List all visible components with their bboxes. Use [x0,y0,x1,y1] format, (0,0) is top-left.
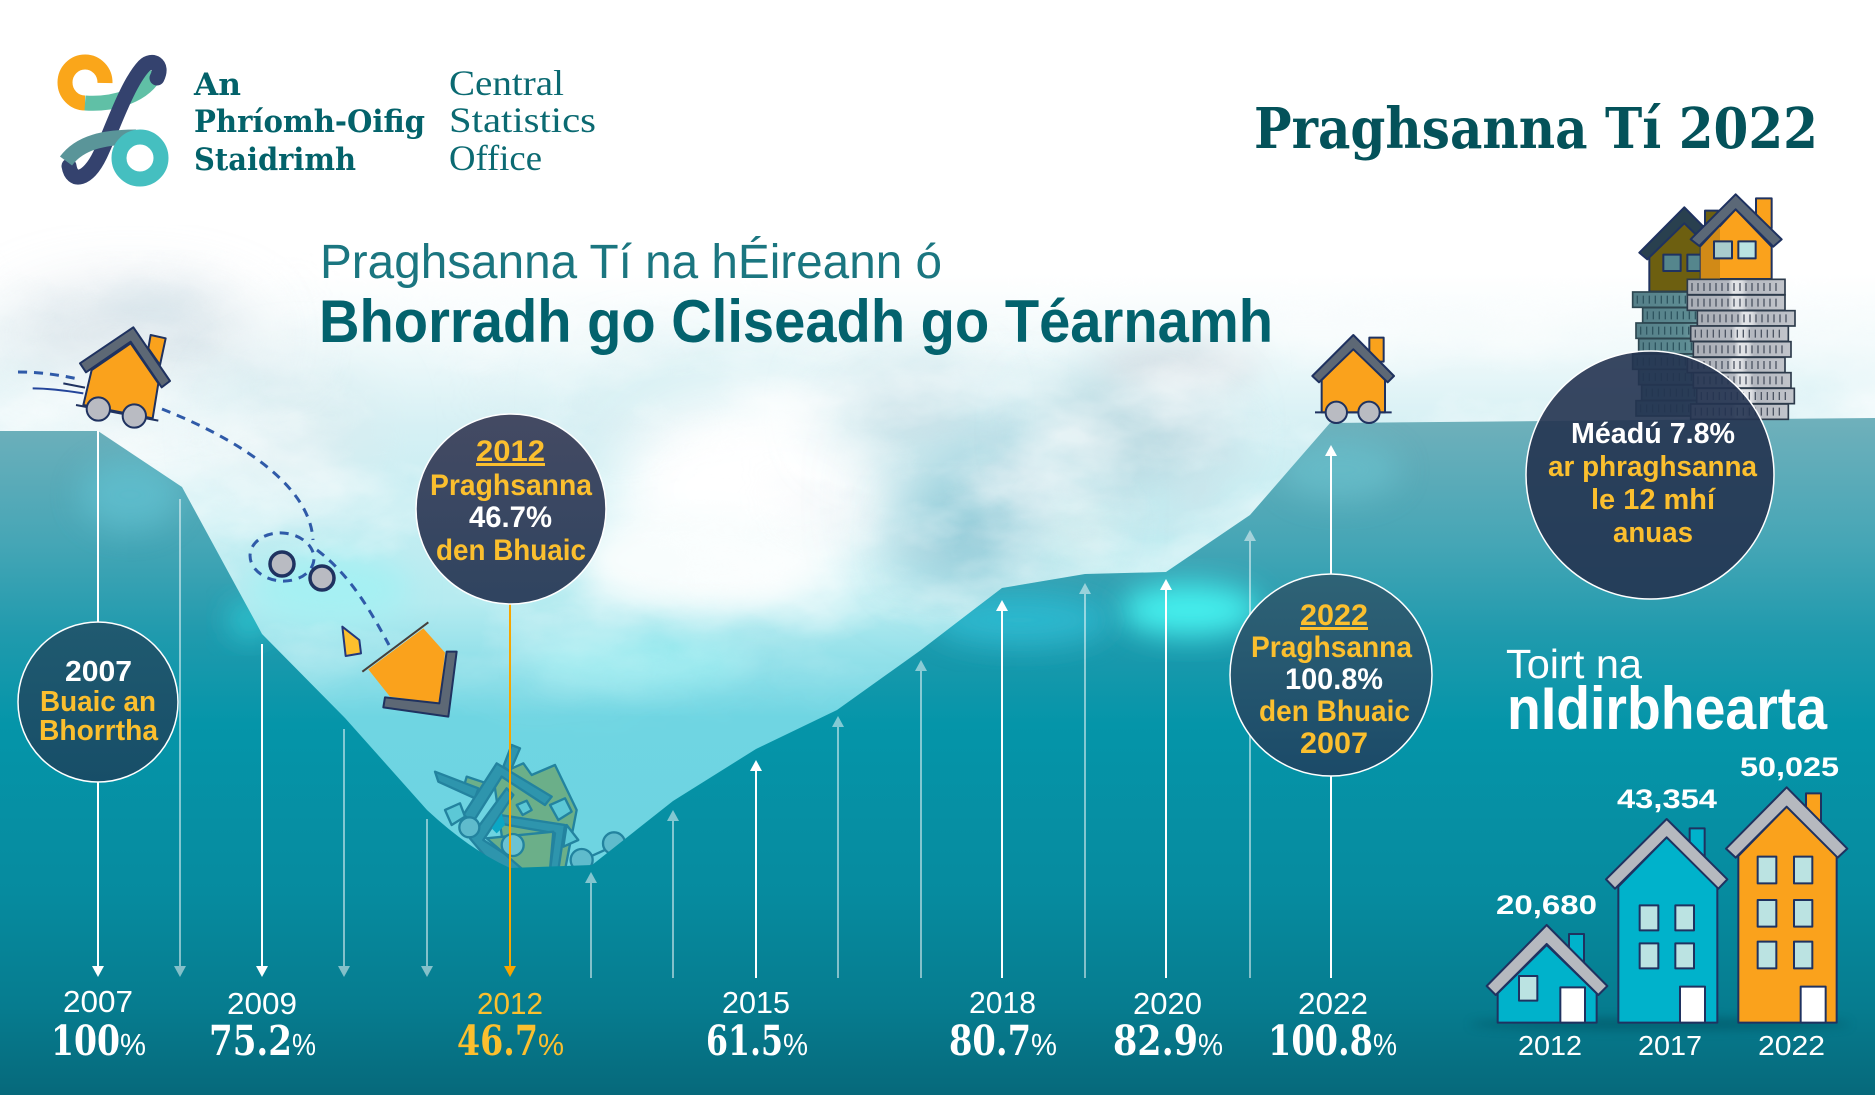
transaction years: 2022 [1758,1030,1825,1061]
down arrows 2007 to 2012 [92,431,516,977]
callout: 2022 recovery: 100.8% [1285,663,1383,696]
falling path dashes [18,372,389,645]
organisation name English: Statistics [449,100,596,140]
callout: 2012 trough [416,414,606,604]
label 2022: 2022 [1298,986,1368,1021]
organisation name Irish: Phríomh-Oifig [194,104,425,140]
recovered house 2022 on wheels [1312,335,1394,423]
callout: 2012 trough: 46.7% [469,501,552,534]
organisation name English: Central [449,63,564,103]
back house [1639,207,1718,292]
label 2012: % [538,1027,564,1062]
organisation name English: Office [449,138,542,178]
label 2012: 2012 [477,986,543,1021]
label 2012: 46.7 [457,1017,538,1065]
callout: 2022 recovery [1230,574,1432,776]
label 2009: 2009 [227,986,297,1021]
label 2020: % [1198,1027,1223,1062]
label 2020: 82.9 [1113,1017,1198,1065]
label 2007: 2007 [63,984,133,1019]
callout: 2022 recovery: 2007 [1300,727,1368,760]
transaction years: 2012 [1518,1030,1582,1061]
organisation name Irish: Staidrimh [194,142,356,178]
label 2020 [1113,986,1223,1065]
heading: transaction volume: Toirt na [1506,641,1642,687]
callout: 2012 trough: 2012 [476,435,545,468]
label 2022 [1268,986,1397,1065]
organisation name Irish: An [193,67,241,103]
valley ground area [0,418,1875,1095]
back coin stack [1633,292,1706,416]
label 2009 [209,986,316,1065]
label 2015: % [783,1027,808,1062]
transaction years [1518,1030,1825,1061]
transaction values: 50,025 [1740,752,1839,782]
callout: 2007 peak: Buaic an [40,686,156,718]
callout: 2007 peak: Bhorrtha [39,715,159,747]
label 2007: 100 [51,1017,120,1065]
organisation name English [449,63,596,178]
label 2009: 75.2 [209,1017,292,1065]
tumbling house [342,622,457,717]
heading: transaction volume: nIdirbhearta [1507,675,1828,742]
callout: 2022 recovery: Praghsanna [1251,631,1412,664]
callout: 2012 trough: den Bhuaic [436,534,586,567]
transaction values: 43,354 [1617,784,1717,814]
transaction years: 2017 [1638,1030,1702,1061]
subtitle light: Praghsanna Tí na hÉireann ó [320,236,942,289]
label 2018 [949,985,1057,1065]
callout: annual increase: le 12 mhí [1591,484,1716,516]
callout: annual increase: Méadú 7.8% [1571,418,1735,450]
logo [65,62,161,179]
label 2009: % [292,1027,316,1062]
label 2015: 61.5 [706,1017,783,1065]
callout: 2007 peak: 2007 [65,656,132,688]
label 2012 [457,986,564,1065]
label 2022: 100.8 [1268,1017,1373,1065]
organisation name Irish [193,67,425,178]
callout: 2007 peak [18,622,178,782]
page title: Praghsanna Tí 2022 [1254,96,1818,162]
label 2007 [51,984,146,1065]
label 2020: 2020 [1133,986,1202,1021]
front house [1691,194,1782,279]
sky and clouds background [0,258,1875,866]
label 2018: 80.7 [949,1017,1031,1065]
transaction house chart [1470,752,1850,1061]
subtitle bold: Bhorradh go Cliseadh go Téarnamh [319,288,1273,355]
wrecked house rubble [435,745,625,871]
callout: annual increase [1526,351,1774,599]
houses on coin stacks [1633,194,1795,419]
heading: transaction volume [1506,641,1828,742]
front coin stack [1687,279,1795,419]
house 2012 [1487,925,1607,1023]
callout: annual increase: ar phraghsanna [1548,451,1758,483]
transaction values [1496,752,1839,920]
label 2015 [706,985,808,1065]
callout: 2022 recovery: den Bhuaic [1259,695,1410,728]
label 2022: % [1373,1027,1397,1062]
house 2022 [1726,787,1847,1023]
transaction values: 20,680 [1496,890,1597,920]
callout: annual increase: anuas [1613,517,1693,549]
up arrows 2013 to 2022 [585,445,1337,978]
label 2018: % [1031,1027,1057,1062]
peak house 2007 on wheels [33,327,170,428]
label 2007: % [120,1027,146,1062]
loose wheels [270,552,334,590]
price index labels [51,984,1397,1065]
callout: 2012 trough: Praghsanna [430,469,592,502]
callout: 2022 recovery: 2022 [1300,599,1368,632]
label 2018: 2018 [969,985,1036,1020]
house 2017 [1606,819,1727,1023]
label 2015: 2015 [722,985,790,1020]
